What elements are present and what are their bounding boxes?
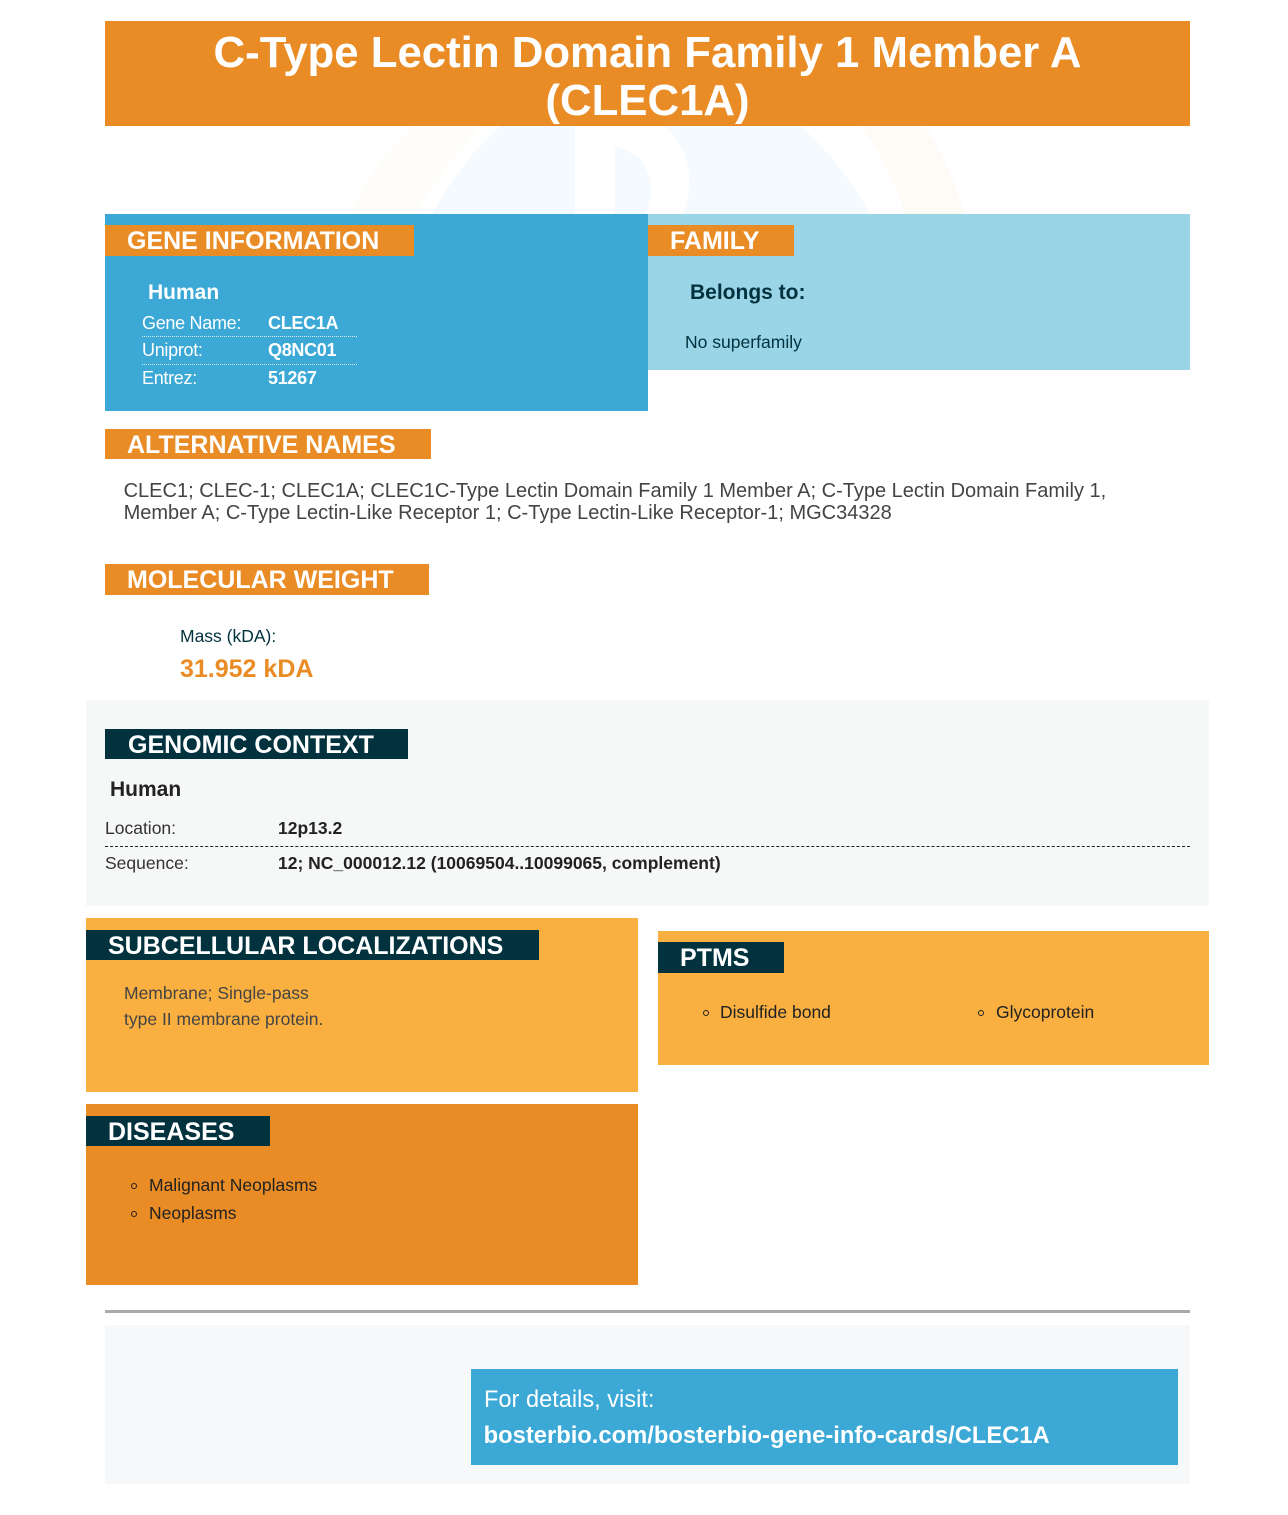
gene info rows: CLEC1A: [268, 313, 338, 333]
location row: Location:: [105, 818, 176, 838]
mass label: Mass (kDA):: [180, 626, 276, 646]
panel: gene information: [105, 214, 648, 411]
localization text: [124, 983, 323, 1029]
watermark logo: [432, 126, 964, 214]
panel: footer: [105, 1325, 1190, 1484]
localization text: Membrane; Single-pass: [124, 983, 309, 1003]
belongs to label: Belongs to:: [690, 281, 806, 304]
title banner: C-Type Lectin Domain Family 1 Member A: [214, 28, 1081, 77]
title banner: (CLEC1A): [545, 76, 750, 125]
alternative names text: [124, 480, 1106, 524]
heading: gene information: GENE INFORMATION: [127, 227, 379, 255]
callout: details link: bosterbio.com/bosterbio-gene-info-cards/CLEC1A: [484, 1422, 1050, 1449]
panel: diseases: [86, 1104, 638, 1285]
heading: ptms: PTMS: [680, 944, 749, 972]
gene info rows: Q8NC01: [268, 340, 336, 360]
heading: subcellular localizations: SUBCELLULAR LOCALIZATIONS: [108, 932, 503, 960]
title banner: [105, 21, 1190, 126]
location row: 12p13.2: [278, 818, 342, 838]
location row: [105, 818, 342, 838]
localization text: type II membrane protein.: [124, 1009, 323, 1029]
disease item: Neoplasms: [149, 1203, 237, 1223]
panel: subcellular localizations: [86, 918, 638, 1092]
panel: genomic context: [86, 700, 1209, 906]
panel: ptms: [658, 931, 1209, 1065]
sequence row: Sequence:: [105, 853, 189, 873]
species label: Human: [148, 281, 219, 304]
alternative names text: CLEC1; CLEC-1; CLEC1A; CLEC1C-Type Lectin Domain Family 1 Member A; C-Type Lectin Domain Family 1,: [124, 480, 1106, 502]
sequence row: 12; NC_000012.12 (10069504..10099065, complement): [278, 853, 721, 873]
heading: diseases: [86, 1116, 270, 1146]
gene info rows: 51267: [268, 368, 317, 388]
heading: family: [648, 225, 794, 256]
mass value: 31.952 kDA: [180, 655, 313, 683]
heading: molecular weight: MOLECULAR WEIGHT: [127, 566, 394, 594]
ptm item: Glycoprotein: [996, 1002, 1094, 1022]
heading: ptms: [658, 942, 784, 973]
family value: No superfamily: [685, 332, 802, 352]
gene info rows: [142, 313, 357, 388]
gene info rows: Entrez:: [142, 368, 197, 388]
species label: Human: [110, 778, 181, 801]
ptm item: Disulfide bond: [720, 1002, 831, 1022]
gene info rows: Gene Name:: [142, 313, 241, 333]
callout: details link: [471, 1369, 1178, 1465]
panel: family: [648, 214, 1190, 370]
heading: alternative names: ALTERNATIVE NAMES: [127, 431, 396, 459]
gene info rows: Uniprot:: [142, 340, 203, 360]
heading: family: FAMILY: [670, 227, 759, 255]
callout: details link: For details, visit:: [484, 1387, 654, 1413]
heading: genomic context: GENOMIC CONTEXT: [128, 731, 374, 759]
alternative names text: Member A; C-Type Lectin-Like Receptor 1; C-Type Lectin-Like Receptor-1; MGC34328: [124, 502, 892, 524]
heading: diseases: DISEASES: [108, 1118, 234, 1146]
disease item: Malignant Neoplasms: [149, 1175, 317, 1195]
